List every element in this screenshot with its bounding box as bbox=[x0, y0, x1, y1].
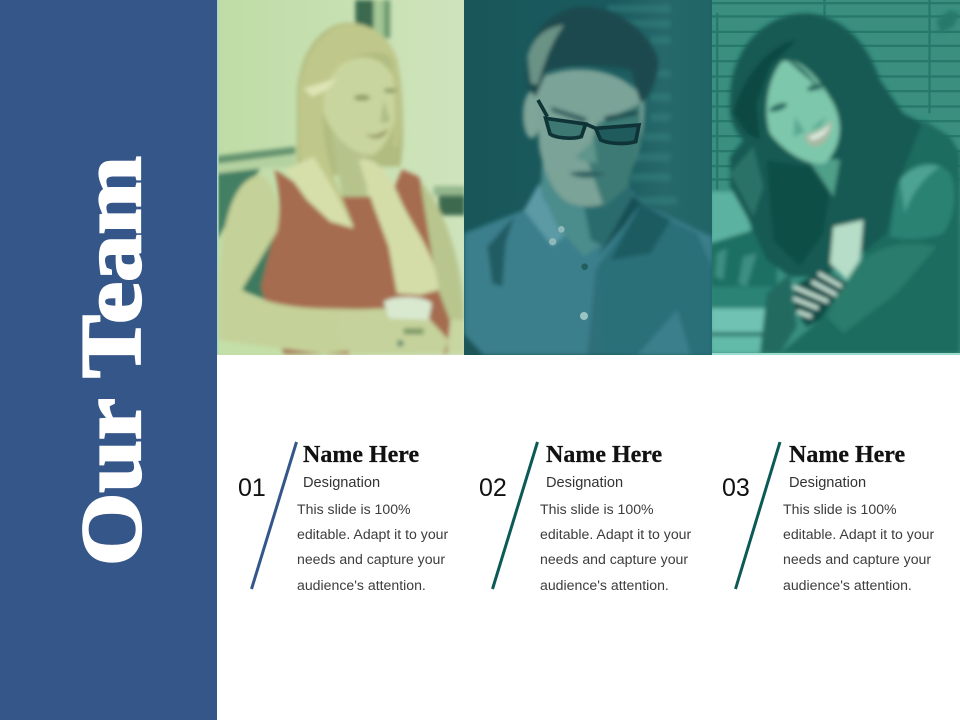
jacket bbox=[780, 120, 960, 353]
hands bbox=[334, 308, 449, 354]
team member 01 bbox=[238, 442, 449, 593]
lower left furniture bbox=[710, 192, 750, 245]
description 02: editable. Adapt it to your bbox=[540, 526, 692, 542]
slash accent 01 bbox=[252, 442, 296, 589]
photo bottom strip bbox=[712, 353, 960, 355]
slash accent 02 bbox=[492, 442, 538, 589]
description 01: This slide is 100% bbox=[297, 501, 411, 517]
description 01: needs and capture your bbox=[297, 551, 445, 567]
number 02: 02 bbox=[479, 474, 507, 502]
name 02: Name Here bbox=[546, 442, 663, 468]
left arm bbox=[219, 172, 353, 355]
slash accent 03 bbox=[736, 442, 780, 589]
team member 03 bbox=[722, 442, 935, 593]
description 02: This slide is 100% bbox=[540, 501, 654, 517]
facial features bbox=[354, 89, 397, 138]
description 03: needs and capture your bbox=[783, 551, 931, 567]
name 03: Name Here bbox=[789, 442, 906, 468]
sleeve bbox=[760, 273, 797, 353]
face bbox=[323, 57, 398, 155]
number 03: 03 bbox=[722, 474, 750, 502]
chest bbox=[830, 220, 863, 280]
description 01 bbox=[297, 501, 449, 593]
shirt buttons bbox=[549, 226, 588, 320]
mouth bbox=[569, 171, 606, 178]
photo: smiling woman in leather jacket bbox=[710, 0, 960, 355]
mouth bbox=[805, 119, 833, 147]
description 01: editable. Adapt it to your bbox=[297, 526, 449, 542]
description 03: audience's attention. bbox=[783, 577, 912, 593]
photo edge highlight bbox=[217, 0, 218, 355]
hair back bbox=[297, 23, 403, 187]
hair bbox=[730, 13, 923, 277]
blinds highlights bbox=[607, 5, 677, 205]
striped top bbox=[793, 270, 847, 327]
shirt bbox=[464, 183, 712, 355]
collar bbox=[524, 183, 571, 247]
right arm bbox=[420, 182, 464, 322]
face bbox=[767, 61, 840, 164]
face bbox=[536, 69, 644, 206]
photo: young man with glasses bbox=[464, 0, 714, 355]
description 02: needs and capture your bbox=[540, 551, 688, 567]
window blinds bbox=[710, 0, 960, 190]
team member 02 bbox=[479, 442, 692, 593]
hair front strands bbox=[299, 24, 399, 227]
plant at top right corner bbox=[936, 10, 959, 30]
sidebar panel bbox=[0, 0, 217, 720]
description 03 bbox=[783, 501, 935, 593]
photo: blonde woman with coffee cup bbox=[217, 0, 465, 355]
neck bbox=[541, 160, 631, 257]
description 01: audience's attention. bbox=[297, 577, 426, 593]
glasses bbox=[538, 100, 639, 143]
description 02: audience's attention. bbox=[540, 577, 669, 593]
eyebrows bbox=[551, 107, 587, 123]
hair bbox=[527, 7, 658, 103]
neck bbox=[807, 157, 840, 197]
description 02 bbox=[540, 501, 692, 593]
cup bbox=[384, 297, 432, 320]
ear bbox=[523, 92, 540, 138]
eyes bbox=[768, 101, 788, 114]
name 01: Name Here bbox=[303, 442, 420, 468]
designation 01: Designation bbox=[303, 475, 380, 491]
description 03: editable. Adapt it to your bbox=[783, 526, 935, 542]
title: Our Team bbox=[63, 156, 159, 566]
description 03: This slide is 100% bbox=[783, 501, 897, 517]
designation 03: Designation bbox=[789, 475, 866, 491]
number 01: 01 bbox=[238, 474, 266, 502]
dress bbox=[258, 169, 450, 354]
designation 02: Designation bbox=[546, 475, 623, 491]
neck bbox=[332, 133, 367, 197]
